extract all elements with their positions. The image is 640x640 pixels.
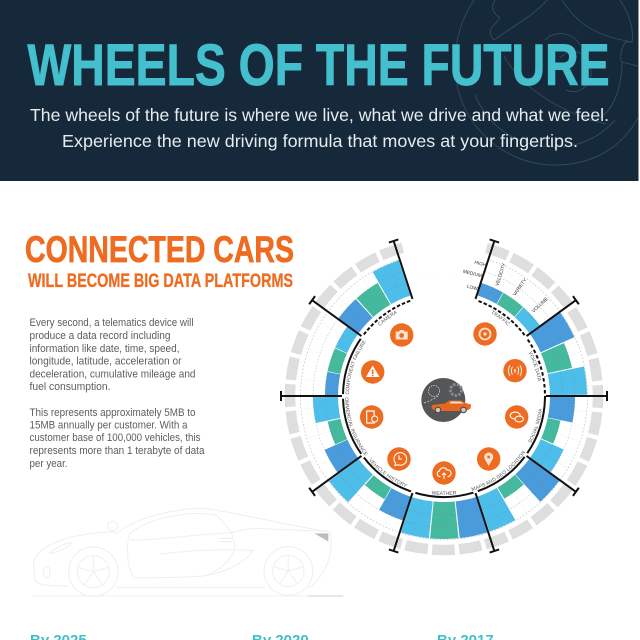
text block: telematics paragraph one: Every second, a telematics device will <box>30 317 194 329</box>
icon: chat bubbles <box>505 405 528 429</box>
text block: telematics paragraph two: 15MB annually per customer. With a <box>30 420 188 432</box>
text block: telematics paragraph two: per year. <box>30 458 68 470</box>
curved segment labels: SOCIAL MEDIA <box>528 408 542 443</box>
icon: center car badge <box>421 378 471 422</box>
legend labels on traffic segment <box>462 260 550 314</box>
text block: telematics paragraph one: produce a data record including <box>30 330 170 342</box>
text block: telematics paragraph one <box>30 317 196 393</box>
inner black arcs <box>302 254 586 538</box>
divider whiskers <box>281 239 607 553</box>
icon: map pin <box>477 447 500 471</box>
text block: telematics paragraph one: deceleration, cumulative mileage and <box>30 368 196 380</box>
icon: camera <box>390 323 413 347</box>
heading: connected cars <box>25 229 294 292</box>
commercial insurance blocks <box>279 231 609 561</box>
icon: clock pin <box>387 447 411 471</box>
segment blocks <box>268 220 620 572</box>
curved segment labels: VEHICLE HISTORY <box>370 458 408 487</box>
text block: telematics paragraph two <box>30 407 205 470</box>
illustration: faint car outline <box>32 508 343 596</box>
text block: telematics paragraph two: represents more than 1 terabyte of data <box>30 445 205 457</box>
curved segment labels: TRAFFIC <box>492 310 510 326</box>
text block: telematics paragraph one: information like date, time, speed, <box>30 343 180 355</box>
subtitle: The wheels of the future is where we live, what we drive and what we feel. <box>30 105 609 125</box>
icon: tire <box>473 322 497 346</box>
curved segment labels: VOICE DATA <box>529 351 542 382</box>
curved segment labels: MAPS AND GEO LOCATION <box>471 450 526 491</box>
curved segment labels: COMMERCIAL INSURANCE <box>345 398 368 456</box>
text block: telematics paragraph one: fuel consumption. <box>30 381 110 393</box>
text block: telematics paragraph two: customer base of 100,000 vehicles, this <box>30 432 201 444</box>
icon: clipboard <box>360 405 383 429</box>
traffic blocks <box>285 237 603 555</box>
icon: faint steering wheel outline <box>455 0 638 165</box>
curved segment labels: COMPONENT FAILURE <box>346 340 366 394</box>
icon: warning triangle <box>361 360 384 384</box>
text block: telematics paragraph two: This represents approximately 5MB to <box>30 407 196 419</box>
subtitle <box>30 105 609 151</box>
heading: connected cars: WILL BECOME BIG DATA PLATFORMS <box>28 271 293 292</box>
voice data blocks <box>270 222 618 570</box>
curved segment labels <box>345 310 542 495</box>
legend labels on traffic segment: VELOCITY <box>495 262 508 287</box>
curved segment labels: CAMERA <box>378 310 398 326</box>
outer grey dashed ring <box>254 206 634 586</box>
vehicle history blocks <box>268 220 620 572</box>
header banner <box>0 0 638 181</box>
icon: signal waves <box>503 359 527 382</box>
legend labels on traffic segment: LOW <box>466 284 479 292</box>
radial data chart <box>280 238 608 556</box>
social media blocks <box>287 239 601 553</box>
component failure blocks <box>295 247 593 545</box>
camera blocks <box>274 226 614 566</box>
text block: telematics paragraph one: longitude, latitude, acceleration or <box>30 356 182 368</box>
icon: cloud <box>432 461 456 485</box>
maps and geolocation blocks <box>270 222 618 570</box>
heading: connected cars: CONNECTED CARS <box>25 229 294 270</box>
curved segment labels: WEATHER <box>432 490 456 495</box>
legend labels on traffic segment: VARIETY <box>512 277 529 297</box>
legend labels on traffic segment: HIGH <box>474 260 487 269</box>
legend labels on traffic segment: VOLUME <box>531 296 550 314</box>
subtitle: Experience the new driving formula that moves at your fingertips. <box>62 131 578 151</box>
weather blocks <box>288 240 600 552</box>
legend labels on traffic segment: MEDIUM <box>462 269 482 279</box>
